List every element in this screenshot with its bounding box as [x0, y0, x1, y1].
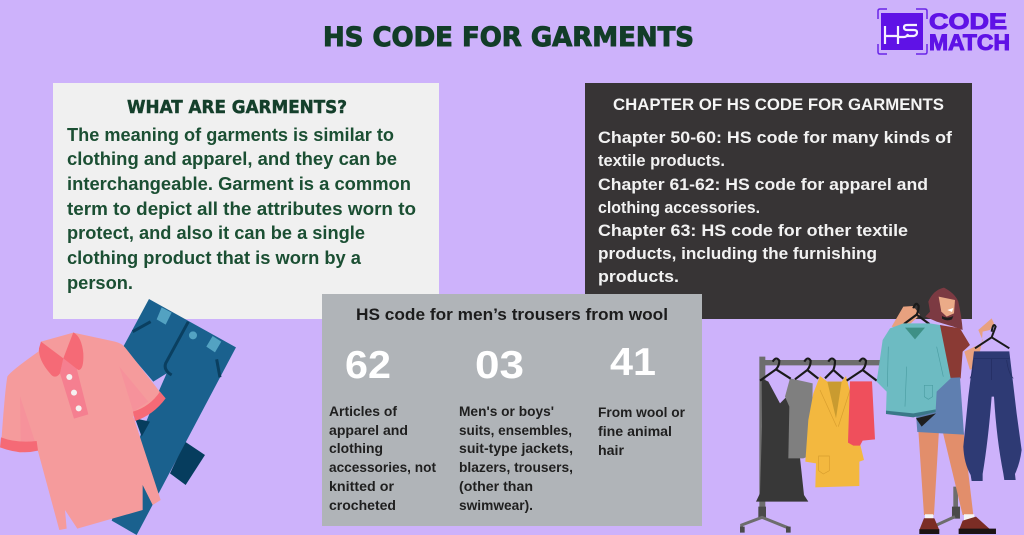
text block: chapter list: products. [598, 267, 679, 286]
column: 03: Men's or boys' [459, 403, 554, 419]
icon: hanger held left [904, 304, 929, 324]
column: 03 [459, 344, 573, 513]
icon: polo shirt [0, 332, 166, 530]
column: 41: fine animal [598, 423, 672, 439]
column: 03: suit-type jackets, [459, 440, 573, 456]
icon: hangers [760, 359, 877, 381]
icon: clothes rack [740, 357, 960, 533]
column: 62: Articles of [329, 403, 397, 419]
logo wordmark: CODE [929, 9, 1007, 34]
illustration: clothes rack and woman [740, 288, 1022, 534]
icon: navy trousers [963, 351, 1022, 481]
text block: garment definition: term to depict all the attributes worn to [67, 199, 416, 219]
column: 62: apparel and [329, 422, 408, 438]
heading: men's trousers: HS code for men’s trousers from wool [356, 305, 668, 324]
text block: garment definition: protect, and also it can be a single [67, 223, 365, 243]
text block: chapter list: Chapter 50-60: HS code for many kinds of [598, 128, 952, 147]
column: 62 [329, 344, 436, 513]
column: 03: suits, ensembles, [459, 422, 572, 438]
column: 41: hair [598, 442, 625, 458]
icon: red scarf [848, 381, 875, 446]
column: 62: accessories, not [329, 459, 436, 475]
illustration: jeans and polo shirt [0, 299, 236, 535]
panel: hs code for men's trousers [322, 294, 702, 526]
icon: jeans [112, 299, 236, 535]
column: 62: crocheted [329, 497, 396, 513]
column: 62: clothing [329, 440, 383, 456]
logo: Code Match [878, 9, 1010, 55]
text block: chapter list: Chapter 63: HS code for other textile [598, 221, 908, 240]
logo wordmark: MATCH [929, 30, 1010, 55]
column: 03: 03 [475, 344, 524, 387]
column: 03: swimwear). [459, 497, 533, 513]
text block: chapter list [598, 128, 952, 286]
text block: chapter list: clothing accessories. [598, 198, 760, 217]
text block: chapter list: products, including the furnishing [598, 244, 877, 263]
heading: what are garments: WHAT ARE GARMENTS? [127, 97, 347, 118]
text block: garment definition: person. [67, 273, 133, 293]
text block: chapter list: textile products. [598, 151, 725, 170]
icon: black dress [756, 378, 808, 502]
icon: hanger held right [975, 325, 1009, 348]
icon: teal blouse [877, 323, 951, 417]
column: 41 [598, 341, 686, 458]
column: 03: (other than [459, 478, 533, 494]
text block: garment definition: clothing product that is worn by a [67, 248, 362, 268]
column: 62: 62 [345, 344, 391, 387]
logo wordmark [929, 9, 1010, 55]
title: HS CODE FOR GARMENTS [323, 22, 694, 53]
text block: garment definition: The meaning of garments is similar to [67, 125, 394, 145]
column: 41: 41 [610, 341, 656, 384]
column: 03: blazers, trousers, [459, 459, 573, 475]
panel: what are garments [53, 83, 439, 319]
icon: grey top [785, 378, 813, 458]
icon: woman [892, 288, 996, 534]
text block: garment definition: interchangeable. Garment is a common [67, 174, 411, 194]
icon: yellow coat [805, 376, 864, 487]
panel: chapter of hs code [585, 83, 972, 319]
text block: chapter list: Chapter 61-62: HS code for apparel and [598, 175, 928, 194]
icon: HS logo mark [878, 9, 927, 54]
column: 62: knitted or [329, 478, 395, 494]
text block: garment definition [67, 125, 416, 293]
heading: chapter of hs code: CHAPTER OF HS CODE FOR GARMENTS [613, 95, 944, 114]
column: 41: From wool or [598, 404, 686, 420]
text block: garment definition: clothing and apparel, and they can be [67, 149, 397, 169]
